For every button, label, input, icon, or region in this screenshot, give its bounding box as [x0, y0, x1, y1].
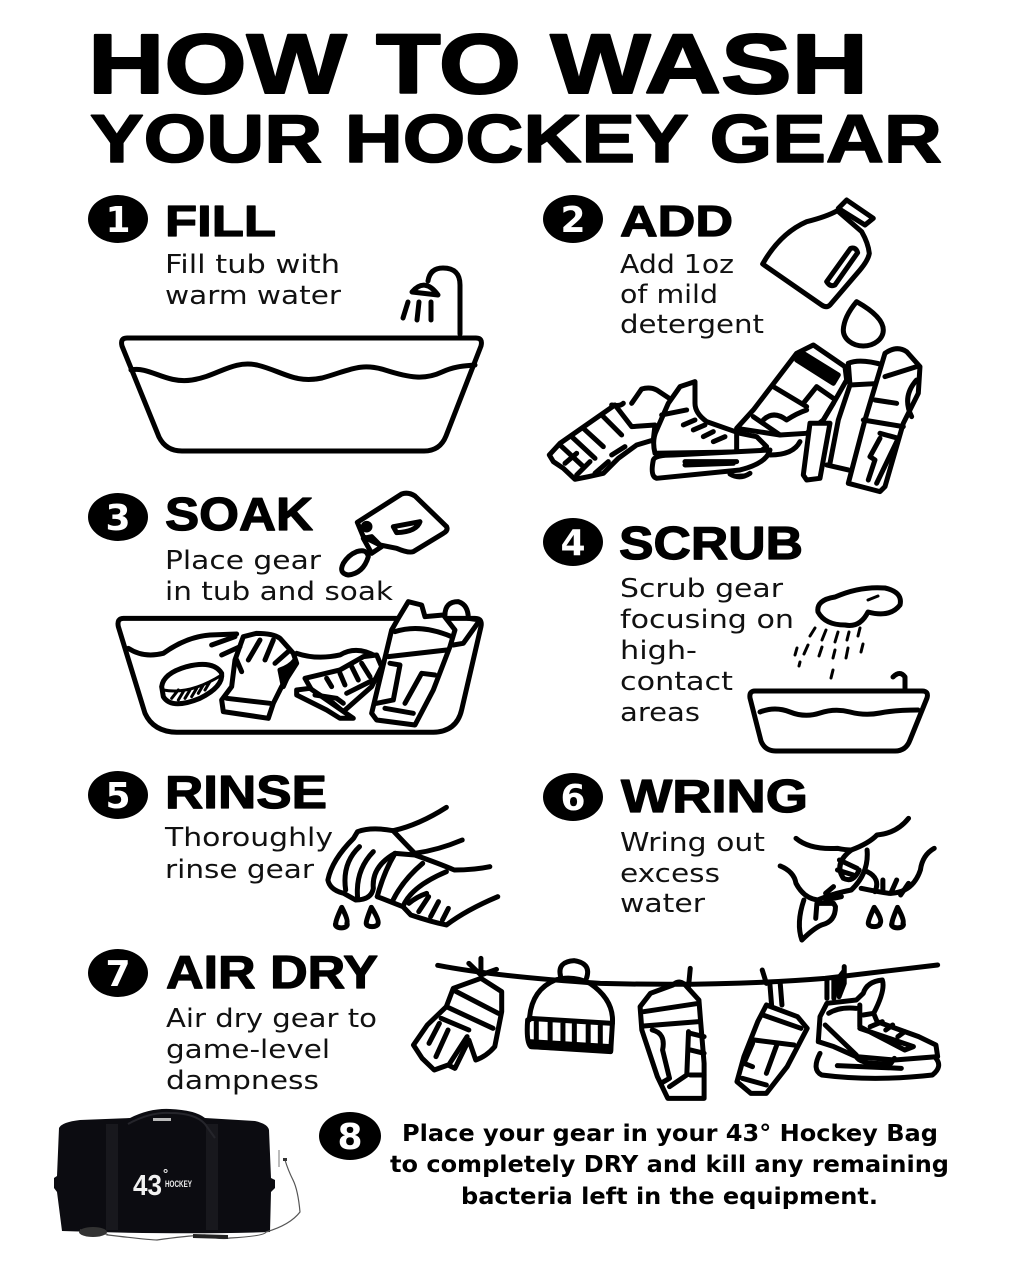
number badge 7: 7: [105, 954, 131, 995]
text: fill: Fill tub with: [165, 250, 340, 280]
number badge 5: 5: [105, 776, 131, 817]
text: fill: [165, 250, 341, 311]
text: step 8: Place your gear in your 43° Hockey Bag: [402, 1121, 938, 1147]
shin pad: [737, 345, 847, 435]
text: add: detergent: [620, 310, 764, 340]
number badge 5: [88, 771, 148, 819]
logo: 43 hockey: 43: [133, 1170, 162, 1202]
skate: [652, 382, 800, 478]
text: wring: excess: [620, 859, 720, 889]
text: fill: warm water: [165, 281, 341, 311]
icon: small tub: [750, 674, 927, 751]
text: soak: [165, 546, 393, 607]
step 4: scrub: [543, 517, 927, 751]
text: soak: Place gear: [165, 546, 321, 576]
elbow pad: [737, 970, 807, 1093]
text: rinse: Thoroughly: [164, 823, 333, 853]
icon: hockey gear pile: [549, 345, 920, 492]
logo: 43 hockey: [133, 1166, 192, 1202]
heading: air dry: AIR DRY: [166, 946, 378, 998]
step 1: fill: [88, 195, 481, 451]
number badge 8: [319, 1112, 381, 1160]
step 8: dry in bag: [319, 1112, 949, 1210]
text: air dry: dampness: [166, 1066, 319, 1096]
text: step 8: to completely DRY and kill any remaining: [390, 1152, 949, 1178]
text: step 8: [390, 1121, 949, 1210]
heading: wring: WRING: [621, 770, 808, 822]
text: scrub: focusing on: [620, 605, 794, 635]
icon: clothesline with gear: [413, 958, 939, 1098]
number badge 4: 4: [560, 523, 586, 564]
leg guard: [803, 349, 920, 492]
step 3: soak: [88, 488, 481, 732]
text: air dry: game-level: [166, 1035, 330, 1065]
title: [88, 17, 942, 177]
text: scrub: areas: [620, 698, 700, 728]
text: wring: [620, 828, 765, 919]
step 5: rinse: [88, 766, 498, 928]
number badge 2: [543, 195, 603, 243]
text: add: [620, 250, 764, 340]
text: wring: water: [620, 889, 705, 919]
skate: [297, 655, 382, 718]
number badge 1: 1: [105, 200, 131, 241]
number badge 6: [543, 773, 603, 821]
icon: tub with gear: [118, 602, 481, 732]
shin pad: [372, 602, 480, 725]
glove: [212, 633, 297, 718]
number badge 2: 2: [560, 200, 586, 241]
text: scrub: contact: [620, 667, 733, 697]
text: scrub: high-: [620, 636, 697, 666]
icon: hands wringing: [780, 818, 934, 940]
beanie: [527, 961, 613, 1052]
number badge 3: [88, 493, 148, 541]
icon: detergent drop: [843, 302, 883, 346]
title: HOW TO WASH: [88, 17, 868, 111]
icon: bathtub with shower: [122, 268, 481, 451]
image: hockey bag with power cord: [54, 1109, 300, 1240]
text: air dry: Air dry gear to: [166, 1004, 377, 1034]
text: wring: Wring out: [620, 828, 765, 858]
icon: hands rinsing: [328, 807, 498, 928]
logo: 43 hockey: HOCKEY: [165, 1179, 192, 1189]
heading: scrub: SCRUB: [619, 517, 803, 569]
heading: add: ADD: [620, 197, 733, 246]
text: step 8: bacteria left in the equipment.: [461, 1184, 878, 1210]
number badge 7: [88, 949, 148, 997]
text: add: of mild: [620, 280, 718, 310]
text: scrub: Scrub gear: [620, 574, 783, 604]
text: add: Add 1oz: [620, 250, 734, 280]
puck brush: [162, 664, 222, 704]
number badge 4: [543, 518, 603, 566]
water: [128, 634, 377, 657]
step 6: wring: [543, 770, 934, 940]
logo: 43 hockey: °: [163, 1166, 168, 1181]
glove: [413, 958, 502, 1070]
heading: soak: SOAK: [165, 488, 313, 540]
text: rinse: [164, 823, 333, 885]
text: scrub: [620, 574, 794, 728]
icon: soap bottle: [342, 493, 447, 575]
heading: rinse: RINSE: [165, 766, 327, 818]
number badge 1: [88, 195, 148, 243]
rope: [438, 965, 938, 984]
text: rinse: rinse gear: [165, 855, 314, 885]
heading: fill: FILL: [165, 197, 276, 246]
text: air dry: [166, 1004, 377, 1096]
tub: [118, 618, 481, 732]
shin guard: [640, 968, 704, 1098]
step 7: air dry: [88, 946, 939, 1098]
glove: [549, 388, 672, 479]
step 2: add: [543, 195, 920, 492]
title: YOUR HOCKEY GEAR: [90, 101, 942, 177]
text: soak: in tub and soak: [165, 577, 393, 607]
skate: [816, 967, 939, 1078]
number badge 3: 3: [105, 498, 131, 539]
icon: detergent jug: [763, 200, 873, 307]
number badge 6: 6: [560, 778, 586, 819]
icon: scrub brush: [795, 588, 900, 678]
number badge 8: 8: [337, 1117, 363, 1158]
power cord: [80, 1160, 300, 1240]
